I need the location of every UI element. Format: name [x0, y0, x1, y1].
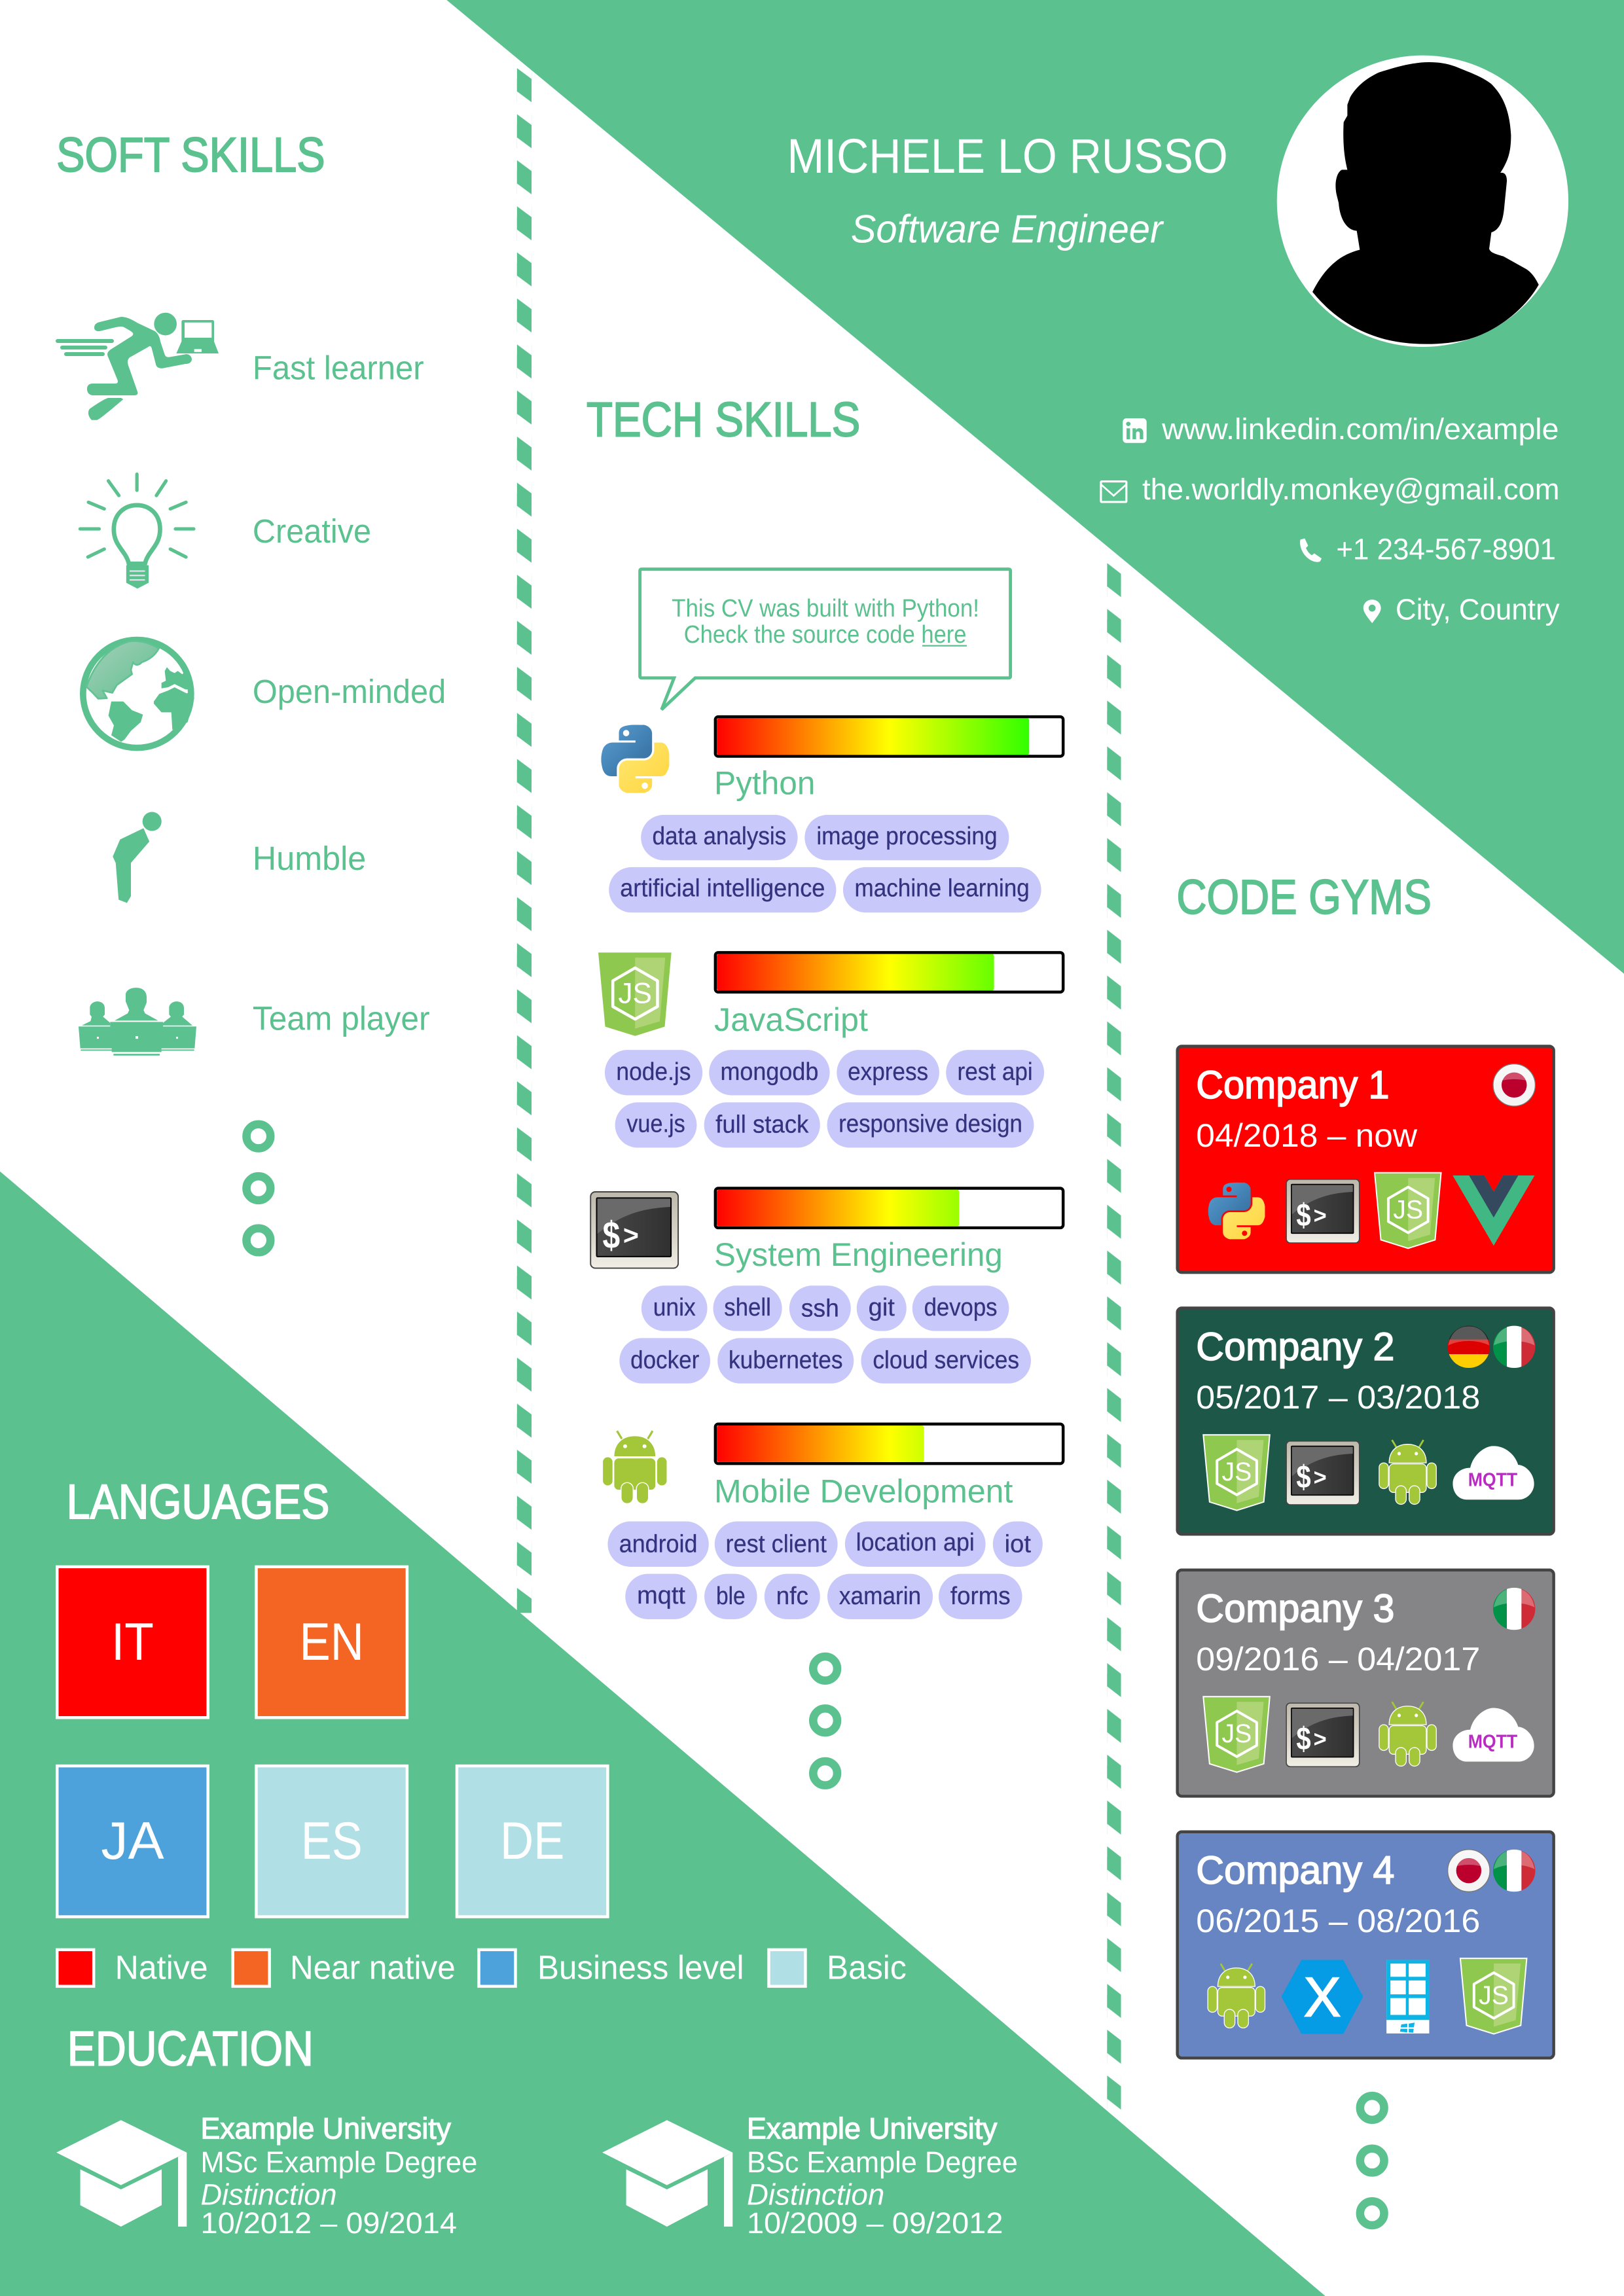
heading: education: EDUCATION — [67, 2022, 314, 2076]
tags: system engineering — [619, 1285, 1031, 1384]
education entry 1: 10/2012 – 09/2014 — [200, 2206, 457, 2240]
tags: system engineering: git — [869, 1294, 895, 1321]
dots: code gyms continuation — [1360, 2096, 1384, 2225]
education entry 1: Example University — [200, 2111, 451, 2145]
tags: mobile development: ble — [716, 1583, 746, 1610]
tags: python: machine learning — [854, 875, 1030, 903]
panel: company 4 — [1178, 1832, 1554, 2058]
panel: company 2: Company 2 — [1196, 1324, 1394, 1369]
job title: Software Engineer — [851, 206, 1164, 251]
contact: email: the.worldly.monkey@gmail.com — [1142, 472, 1560, 506]
icon: node js — [598, 952, 672, 1037]
callout: Check the source code here — [684, 620, 967, 648]
language tiles: EN — [299, 1613, 364, 1672]
education entry 2: 10/2009 – 09/2012 — [747, 2206, 1003, 2240]
panel: python skill — [601, 717, 1063, 912]
tags: javascript: full stack — [715, 1111, 809, 1139]
heading: code gyms: CODE GYMS — [1177, 870, 1432, 924]
dots: tech skills continuation — [813, 1657, 837, 1785]
panel: system engineering skill — [590, 1189, 1063, 1384]
icon: android — [602, 1431, 667, 1503]
panel: company 3: 09/2016 – 04/2017 — [1196, 1640, 1480, 1677]
contact: location: City, Country — [1396, 592, 1560, 626]
panel: company 4: 06/2015 – 08/2016 — [1196, 1902, 1480, 1939]
tags: javascript: rest api — [958, 1058, 1033, 1086]
tags: mobile development: android — [619, 1530, 697, 1558]
education entry 2: Example University — [747, 2111, 998, 2145]
icon: terminal — [590, 1192, 678, 1268]
panel: javascript skill — [598, 952, 1063, 1148]
icon: team — [79, 988, 196, 1056]
icon: light bulb — [80, 474, 194, 588]
panel: company 1: Company 1 — [1196, 1062, 1390, 1107]
label: javascript: JavaScript — [714, 1001, 868, 1038]
label: system engineering: System Engineering — [714, 1236, 1003, 1273]
tags: javascript: express — [848, 1058, 928, 1086]
name: MICHELE LO RUSSO — [787, 129, 1228, 183]
tags: mobile development: iot — [1005, 1530, 1031, 1558]
tags: system engineering: kubernetes — [729, 1347, 842, 1374]
tags: python: data analysis — [653, 823, 786, 850]
text: fast learner: Fast learner — [253, 348, 424, 386]
education entry 2: Distinction — [747, 2178, 884, 2212]
tags: mobile development: rest client — [726, 1530, 827, 1558]
panel: company 3: Company 3 — [1196, 1586, 1394, 1630]
language legend — [57, 1948, 907, 1986]
tags: python: image processing — [816, 823, 998, 850]
language tiles: IT — [111, 1613, 154, 1672]
contact: linkedin: www.linkedin.com/in/example — [1161, 412, 1559, 446]
panel: company 4: X — [1304, 1967, 1341, 2029]
language tiles — [57, 1567, 607, 1917]
panel: company 2 — [1178, 1308, 1554, 1534]
heading: languages: LANGUAGES — [67, 1475, 329, 1529]
tags: mobile development: nfc — [776, 1583, 808, 1610]
tags: system engineering: devops — [924, 1294, 997, 1321]
language legend: Basic — [827, 1948, 907, 1986]
icon: graduation cap — [56, 2120, 187, 2227]
tags: system engineering: unix — [653, 1294, 696, 1321]
language tiles: DE — [500, 1812, 564, 1871]
panel: company 1: 04/2018 – now — [1196, 1117, 1418, 1154]
contact: phone: +1 234-567-8901 — [1336, 532, 1556, 566]
panel: mobile development skill — [602, 1424, 1063, 1619]
icon: humble person — [113, 812, 162, 903]
tags: system engineering: ssh — [801, 1295, 839, 1322]
green header shape — [446, 0, 1624, 974]
tags: mobile development — [607, 1521, 1043, 1619]
language legend: Business level — [537, 1948, 744, 1986]
label: mobile development: Mobile Development — [714, 1472, 1013, 1509]
tags: python — [609, 815, 1041, 912]
dots: soft skills continuation — [247, 1124, 270, 1252]
tags: mobile development: forms — [950, 1583, 1011, 1610]
education entry 2: BSc Example Degree — [747, 2145, 1018, 2179]
tags: python: artificial intelligence — [620, 875, 825, 903]
panel: company 1 — [1178, 1047, 1554, 1272]
language legend: Near native — [290, 1948, 456, 1986]
tags: mobile development: location api — [856, 1529, 975, 1556]
tags: mobile development: xamarin — [839, 1583, 921, 1610]
profile photo — [1277, 56, 1568, 347]
skill bar: system engineering — [715, 1189, 1063, 1228]
education entry 1: Distinction — [200, 2178, 337, 2212]
tags: javascript: responsive design — [839, 1110, 1022, 1138]
tags: system engineering: docker — [630, 1347, 700, 1374]
tags: javascript: node.js — [616, 1058, 691, 1086]
education entry 1 — [56, 2111, 477, 2240]
text: creative: Creative — [253, 512, 371, 550]
education entry 2 — [602, 2111, 1018, 2240]
text: humble: Humble — [253, 839, 366, 877]
panel: company 4: Company 4 — [1196, 1848, 1394, 1892]
icon: graduation cap — [602, 2120, 732, 2227]
icon: python — [601, 725, 670, 795]
language legend: Native — [115, 1948, 208, 1986]
callout — [640, 569, 1011, 709]
heading: tech skills: TECH SKILLS — [586, 393, 860, 447]
callout: This CV was built with Python! — [672, 594, 979, 622]
skill bar: javascript — [715, 952, 1063, 992]
tags: mobile development: mqtt — [637, 1582, 685, 1609]
tags: system engineering: cloud services — [873, 1347, 1019, 1374]
language tiles: ES — [301, 1812, 363, 1871]
skill bar: python — [715, 717, 1063, 757]
icon: globe — [80, 637, 194, 751]
language tiles: JA — [101, 1812, 164, 1871]
green footer shape — [0, 1172, 1326, 2296]
panel: company 2: 05/2017 – 03/2018 — [1196, 1378, 1480, 1416]
tags: javascript — [605, 1050, 1044, 1148]
heading: soft skills: SOFT SKILLS — [56, 128, 325, 182]
tags: system engineering: shell — [724, 1294, 771, 1321]
text: open-minded: Open-minded — [253, 672, 446, 710]
icon: runner — [56, 313, 219, 420]
panel: company 3 — [1178, 1570, 1554, 1796]
skill bar: mobile development — [715, 1424, 1063, 1463]
label: python: Python — [714, 764, 815, 801]
education entry 1: MSc Example Degree — [200, 2145, 477, 2179]
text: team player: Team player — [253, 999, 430, 1037]
tags: javascript: vue.js — [626, 1110, 685, 1138]
tags: javascript: mongodb — [720, 1058, 818, 1086]
